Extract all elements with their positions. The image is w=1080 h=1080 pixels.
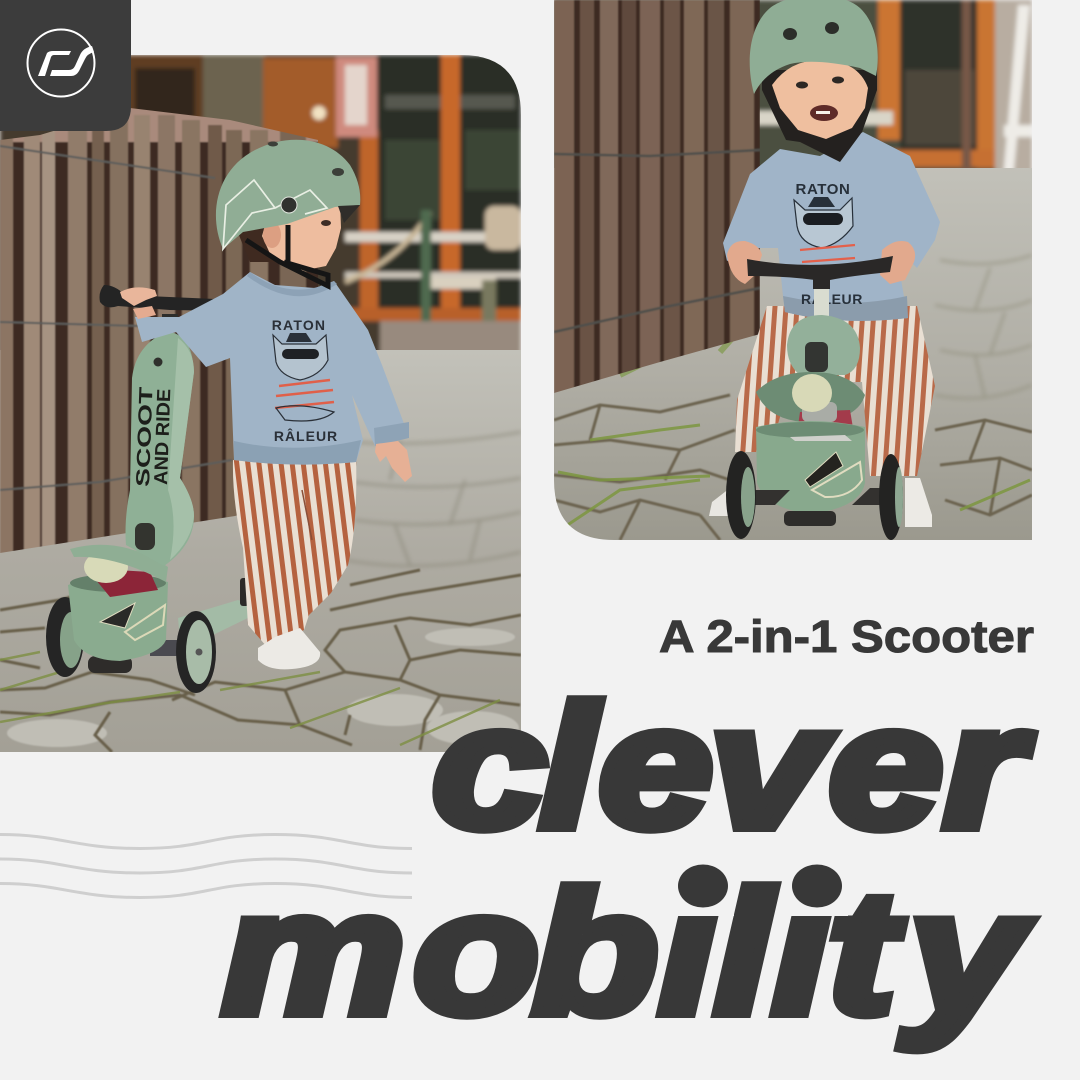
scooter: deck, wheels and basket (46, 545, 253, 693)
toddler: sweatshirt: RÂLEUR (801, 290, 863, 307)
toddler: sweatshirt: RATON (272, 317, 326, 333)
decorative waves (0, 834, 412, 898)
photo background: cafe doorway (554, 0, 1032, 168)
scooter: handlebar and stem (747, 256, 893, 375)
toddler: sweatshirt: RATON (796, 181, 850, 198)
toddler: head and helmet (216, 140, 360, 286)
toddler: trousers and shoes (233, 455, 356, 669)
photo ground: cobblestones (554, 168, 1032, 540)
toddler: sweatshirt: RÂLEUR (274, 427, 338, 444)
photo: toddler with scooter beside fence (0, 55, 521, 752)
icon: brand mark (28, 30, 94, 96)
scooter: wheels (726, 451, 903, 540)
toddler: sweatshirt (723, 132, 940, 321)
toddler: trousers (709, 306, 935, 527)
toddler: sweatshirt (135, 272, 409, 465)
logo badge (0, 0, 131, 131)
scooter: frame and handlebar: SCOOT (133, 386, 158, 487)
scooter: frame and handlebar: AND RIDE (151, 389, 175, 485)
photo: toddler facing camera (554, 0, 1032, 540)
scooter: frame and handlebar (100, 285, 214, 565)
photo background: cafe (0, 55, 521, 355)
photo: wooden fence (554, 0, 760, 395)
photo: wooden fence (0, 100, 320, 560)
photo ground: cobblestones (0, 350, 521, 752)
subheading: A 2-in-1 Scooter (659, 611, 1034, 662)
toddler: hands (120, 287, 412, 482)
heading: mobility: mobility (222, 855, 1033, 1050)
toddler: head and helmet (750, 0, 878, 162)
toddler: hands (727, 241, 915, 284)
scooter: toy and basket (756, 372, 865, 526)
heading: clever: clever (432, 669, 1033, 864)
